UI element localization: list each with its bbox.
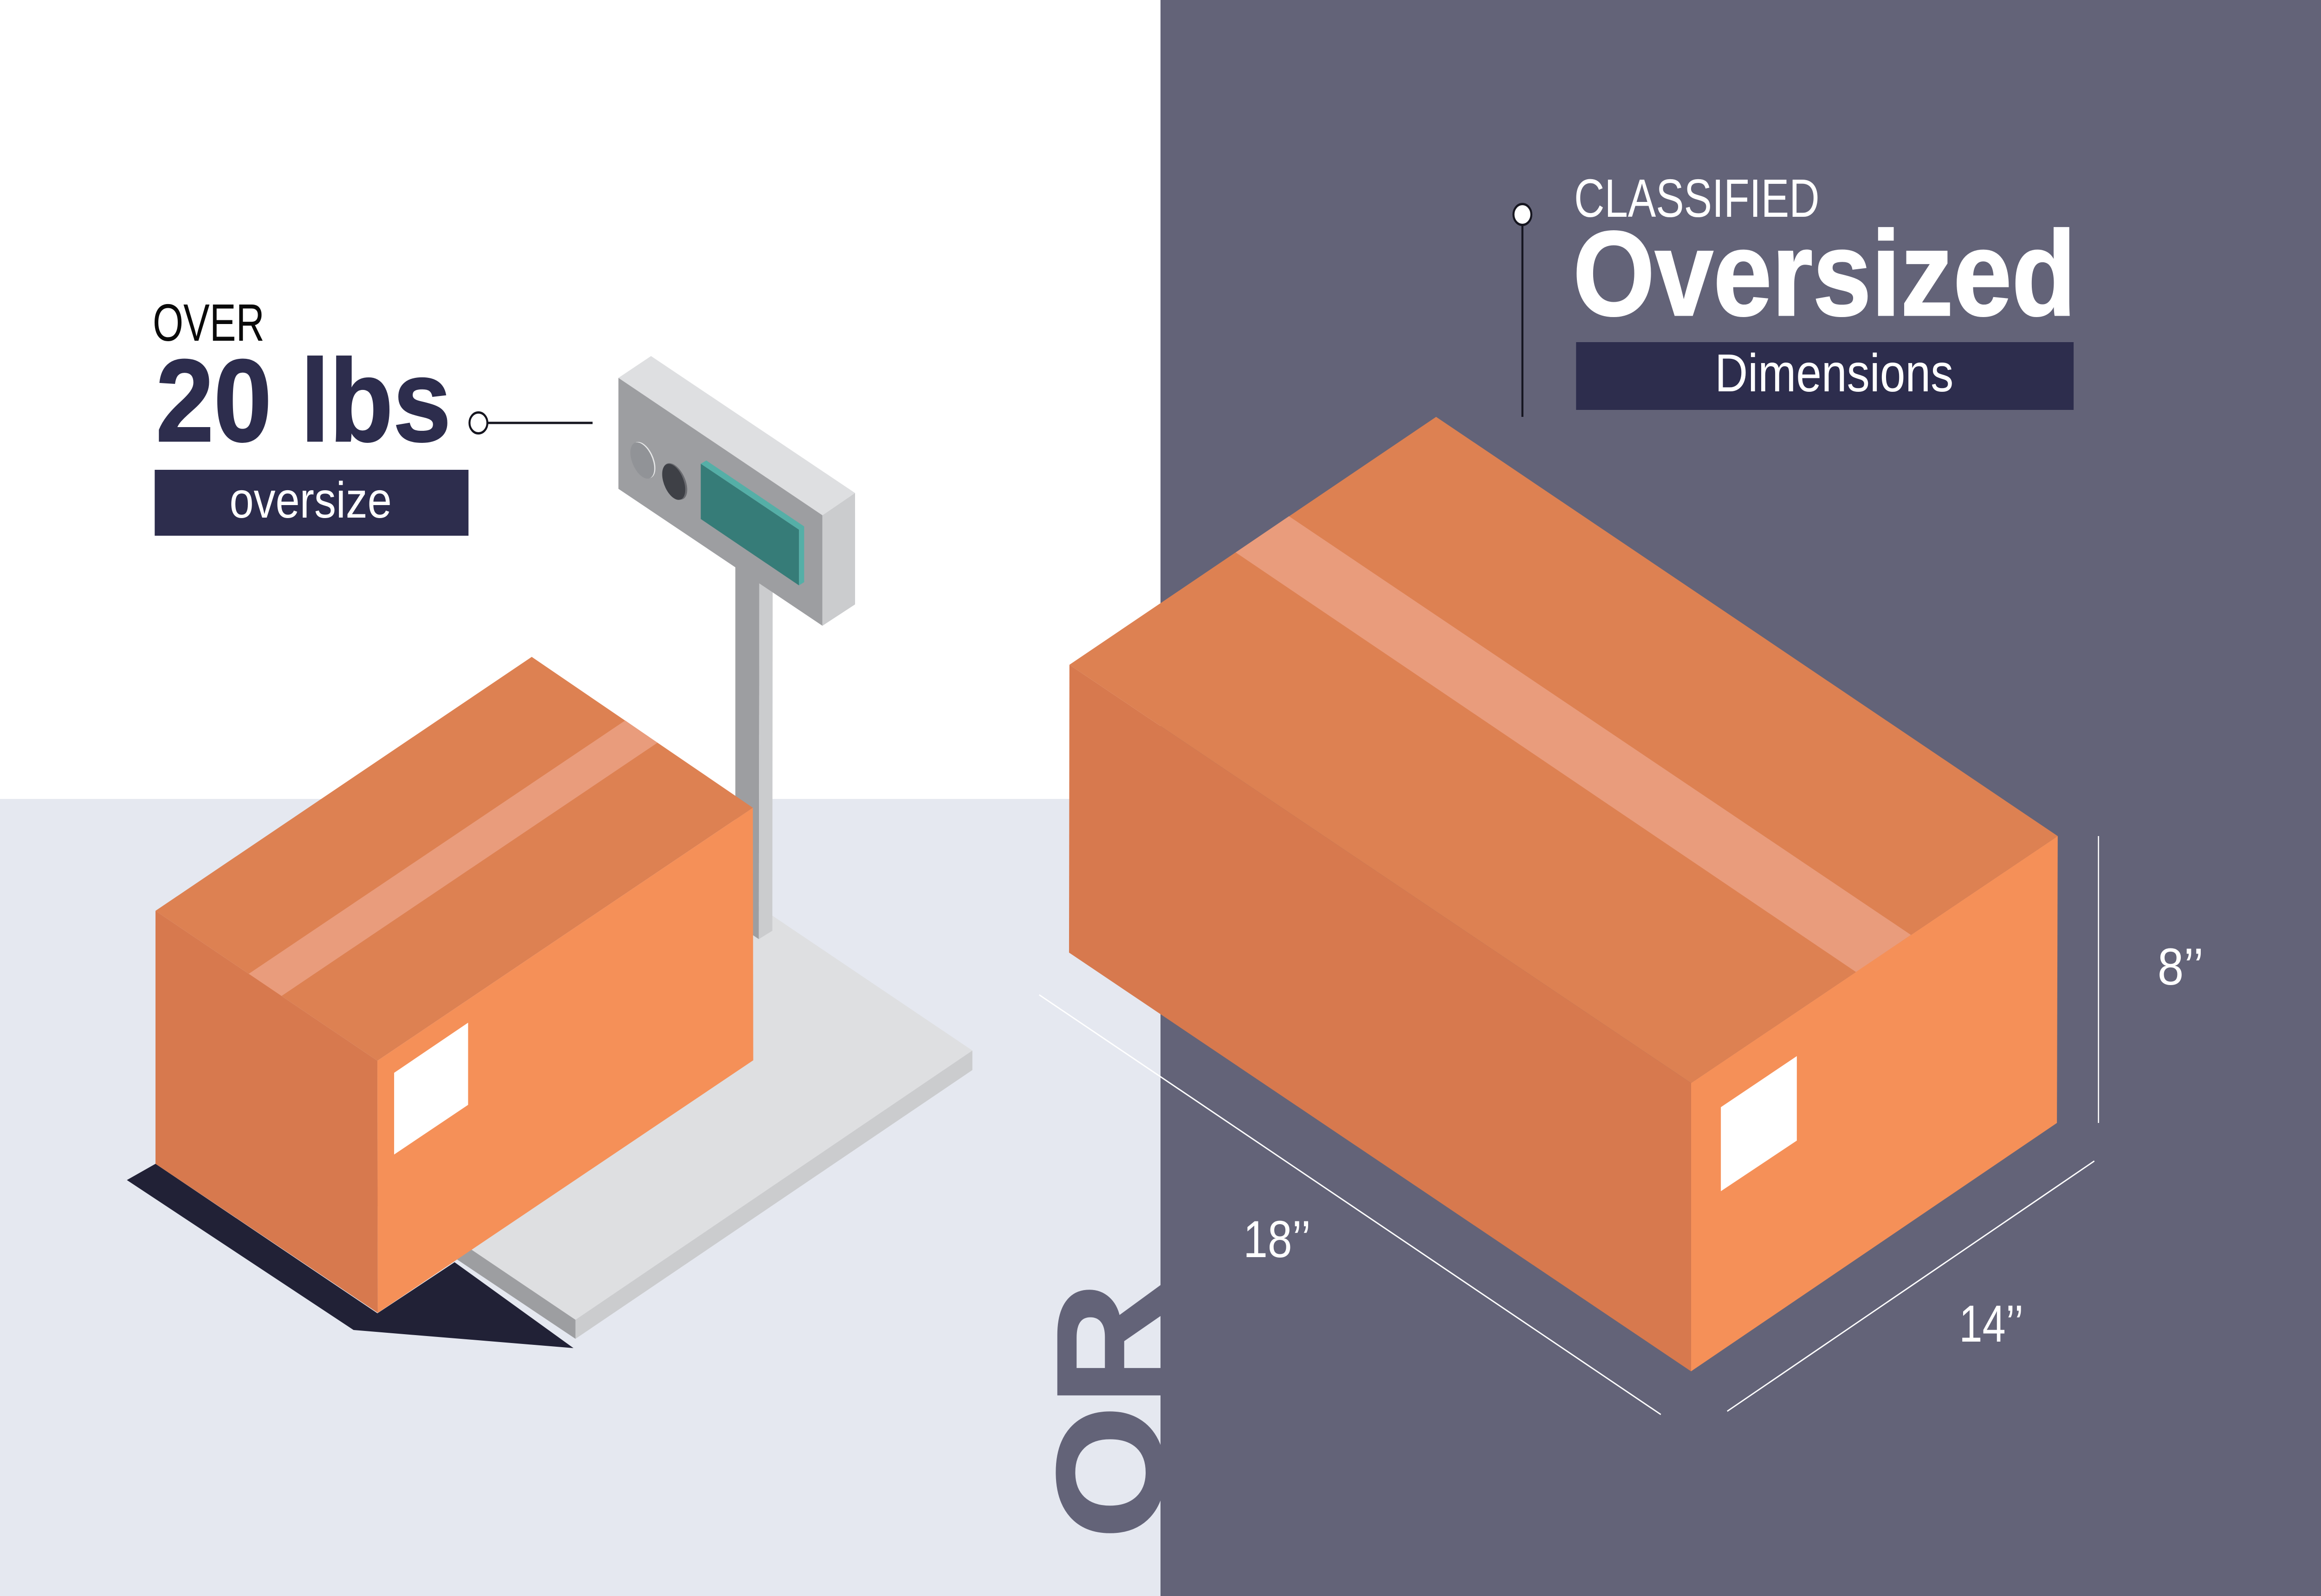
dimension: 18 inches [1039,995,1661,1414]
small box top [156,657,753,1061]
heading: Oversized: Oversized [1573,207,2076,341]
panel: dark right background [1160,0,2321,1596]
callout: over 20 lbs [153,294,593,536]
tag: Dimensions [1576,342,2074,410]
tag: Dimensions: Dimensions [1715,343,1953,403]
illustration: weighing scale [342,356,972,1339]
pointer to scale [469,412,593,434]
small box shadow [127,1164,573,1348]
pointer line [1513,204,1531,417]
callout: classified oversized dimensions [1513,168,2076,417]
dimension: 14 inches: 14’’ [1959,1295,2023,1353]
large box label [1721,1056,1797,1191]
display screen [701,461,804,585]
illustration: small box on scale [156,657,753,1313]
scale head [618,356,855,626]
dimension: 18 inches: 18’’ [1243,1211,1311,1269]
label: OVER: OVER [153,294,265,352]
illustration: large box [1069,417,2058,1371]
small box tape [248,720,657,996]
background: pale floor [0,799,1160,1596]
button: grey [630,436,655,485]
small box label [394,1023,468,1155]
background: white wall [0,0,2321,799]
large box top [1070,417,2058,1083]
small box left face [156,911,378,1313]
large box right face [1691,836,2058,1371]
word: OR: OR [1026,1282,1194,1539]
large box left face [1069,665,1691,1371]
large box tape [1236,516,1911,972]
button: dark [662,457,687,506]
label: CLASSIFIED: CLASSIFIED [1574,168,1820,228]
scale pole [735,534,773,939]
small box right face [377,808,753,1313]
tag: oversize: oversize [229,471,392,529]
dimension: 8 inches: 8’’ [2158,938,2204,996]
tag: oversize [155,470,468,536]
dimension: 14 inches [1727,1161,2094,1411]
heading: 20 lbs: 20 lbs [156,335,451,466]
scale base platform [342,894,972,1339]
